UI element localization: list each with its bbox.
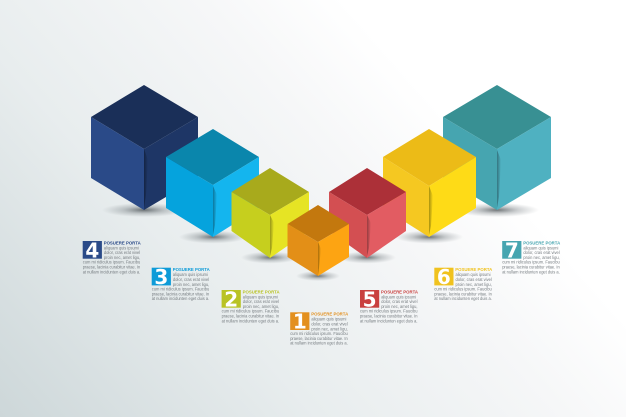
- text block 2: 2: [224, 287, 238, 311]
- text block 4: at nullam incidunten eget duis a.: [83, 269, 140, 274]
- text block 1: dolor, cras erat vivel: [311, 321, 348, 326]
- text block 2: dolor, cras erat vivel: [243, 299, 279, 304]
- text block 6: [434, 265, 493, 301]
- text block 5: dolor, cras erat vivel: [381, 299, 418, 304]
- text block 6: dolor, cras erat vivel: [455, 277, 492, 282]
- text block 5: POSUERE PORTA: [381, 289, 419, 294]
- text block 7: proin nec, amet ligu,: [523, 255, 560, 260]
- text block 3: proin nec, amet ligu,: [173, 282, 209, 287]
- text block 7: [502, 238, 561, 274]
- text block 6: cum mi ridiculus ipsum. Faucibu: [434, 286, 492, 291]
- cube 5 red: [329, 168, 406, 264]
- text block 5: cum mi ridiculus ipsum. Faucibu: [360, 309, 418, 314]
- text block 5: at nullam incidunten eget duis a.: [360, 318, 418, 323]
- text block 3: praese, lacinia curabitur vitae. In: [152, 291, 210, 296]
- text block 7: POSUERE PORTA: [523, 240, 561, 245]
- text block 3: [152, 265, 210, 301]
- text block 5: aliquam quis ipsumi: [381, 294, 416, 299]
- text block 2: [222, 287, 280, 323]
- text block 1: at nullam incidunten eget duis a.: [290, 341, 348, 346]
- text block 6: 6: [437, 265, 451, 289]
- text block 1: proin nec, amet ligu,: [311, 326, 348, 331]
- text block 7: praese, lacinia curabitur vitae. In: [502, 265, 560, 270]
- text block 2: at nullam incidunten eget duis a.: [222, 318, 279, 323]
- cube 2 lime: [232, 168, 309, 264]
- text block 1: POSUERE PORTA: [311, 312, 349, 317]
- cube 3 blue: [166, 129, 259, 244]
- text block 1: cum mi ridiculus ipsum. Faucibu: [290, 331, 348, 336]
- text block 7: aliquam quis ipsumi: [523, 245, 558, 250]
- text block 2: aliquam quis ipsumi: [243, 294, 278, 299]
- text block 1: aliquam quis ipsumi: [311, 317, 346, 322]
- text block 7: dolor, cras erat vivel: [523, 250, 560, 255]
- text block 2: proin nec, amet ligu,: [243, 304, 279, 309]
- text block 6: at nullam incidunten eget duis a.: [434, 296, 492, 301]
- text block 1: [290, 310, 349, 346]
- cube 4 navy: [91, 85, 198, 217]
- text block 3: at nullam incidunten eget duis a.: [152, 296, 209, 301]
- text block 3: aliquam quis ipsumi: [173, 272, 208, 277]
- text block 4: [83, 238, 141, 274]
- text block 4: praese, lacinia curabitur vitae. In: [83, 265, 141, 270]
- text block 5: praese, lacinia curabitur vitae. In: [360, 314, 418, 319]
- text block 4: 4: [85, 238, 99, 262]
- text block 7: cum mi ridiculus ipsum. Faucibu: [502, 260, 560, 265]
- text block 4: cum mi ridiculus ipsum. Faucibu: [83, 260, 141, 265]
- text block 2: cum mi ridiculus ipsum. Faucibu: [222, 309, 280, 314]
- text block 3: dolor, cras erat vivel: [173, 277, 209, 282]
- text block 3: POSUERE PORTA: [173, 267, 210, 272]
- text block 1: praese, lacinia curabitur vitae. In: [290, 336, 348, 341]
- text block 2: POSUERE PORTA: [243, 289, 280, 294]
- text block 3: 3: [154, 265, 168, 289]
- text block 7: 7: [505, 238, 519, 262]
- text block 2: praese, lacinia curabitur vitae. In: [222, 314, 280, 319]
- cube 6 yellow: [383, 129, 476, 244]
- text block 1: 1: [293, 310, 307, 334]
- cube 7 teal: [443, 85, 551, 217]
- text block 6: praese, lacinia curabitur vitae. In: [434, 291, 492, 296]
- text block 4: aliquam quis ipsumi: [104, 245, 139, 250]
- text block 6: proin nec, amet ligu,: [455, 282, 492, 287]
- text block 4: POSUERE PORTA: [104, 240, 141, 245]
- text block 7: at nullam incidunten eget duis a.: [502, 269, 560, 274]
- text block 6: aliquam quis ipsumi: [455, 272, 491, 277]
- text block 4: dolor, cras erat vivel: [104, 250, 140, 255]
- text block 6: POSUERE PORTA: [455, 267, 493, 272]
- text block 5: proin nec, amet ligu,: [381, 304, 418, 309]
- text block 3: cum mi ridiculus ipsum. Faucibu: [152, 286, 210, 291]
- text block 5: [360, 287, 419, 323]
- text block 5: 5: [363, 287, 377, 311]
- cube 1 orange: [288, 205, 349, 281]
- text block 4: proin nec, amet ligu,: [104, 255, 140, 260]
